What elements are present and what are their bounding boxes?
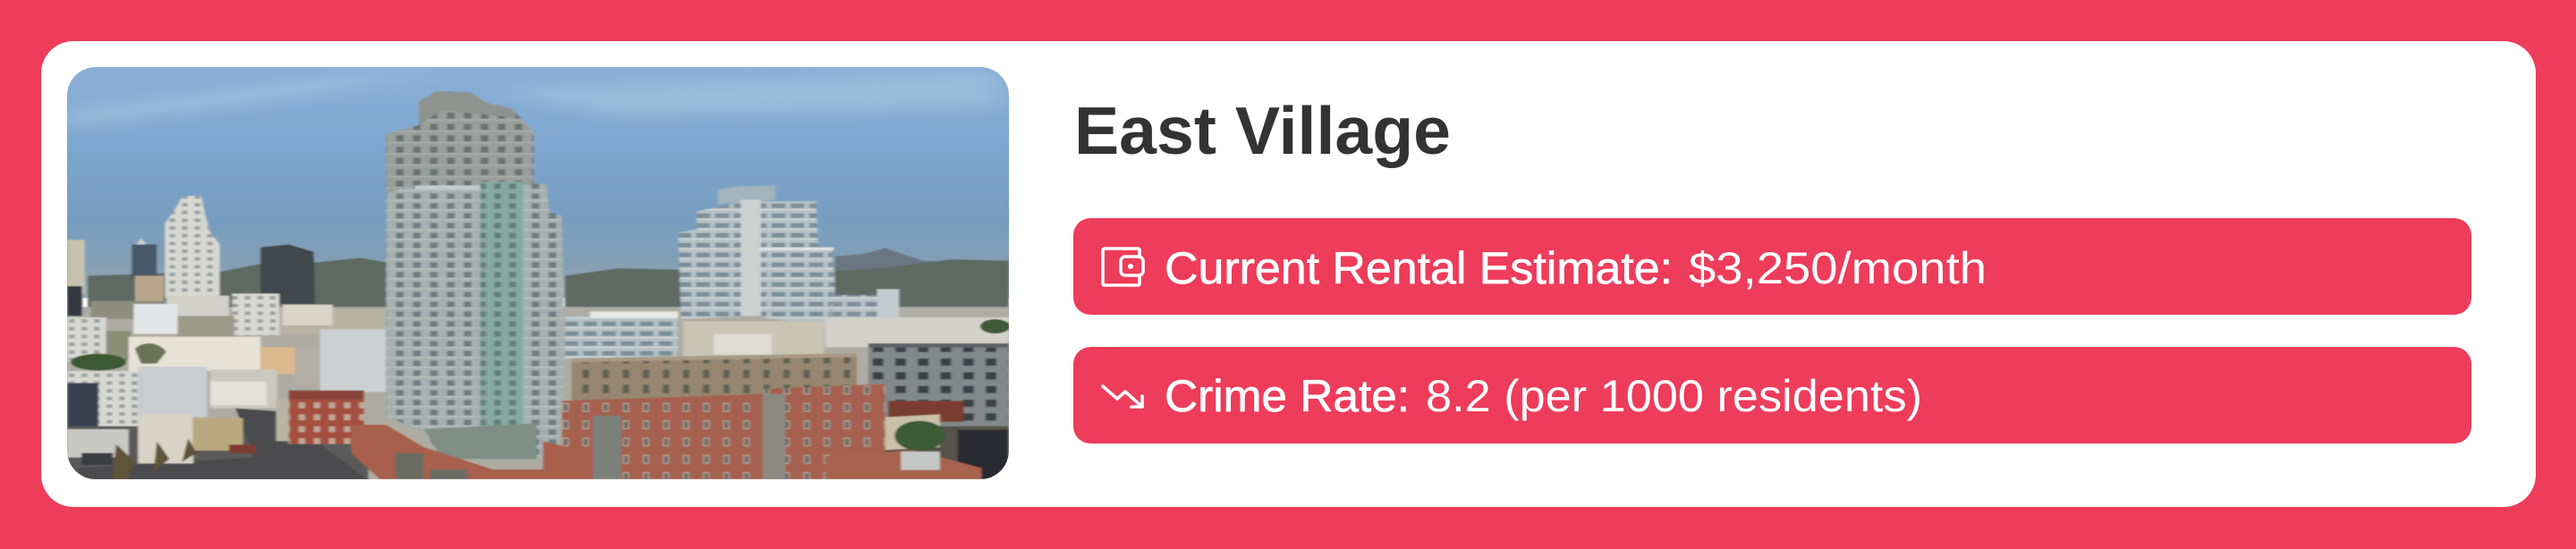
brick apartment block xyxy=(562,353,1009,479)
stat bar: crime rate xyxy=(1073,347,2471,443)
mid-ground city base xyxy=(54,307,1033,486)
text: crime rate xyxy=(1165,371,1922,421)
foreground low brick xyxy=(352,425,981,479)
right tower xyxy=(678,185,835,328)
text: rental estimate: Current Rental Estimate: xyxy=(1165,243,1673,293)
left skyline xyxy=(67,195,386,480)
icon: wallet xyxy=(1101,247,1145,287)
text: rental estimate xyxy=(1165,243,1987,293)
text: rental estimate: $3,250/month xyxy=(1689,243,1987,293)
main tower xyxy=(386,91,565,459)
text: crime rate: 8.2 (per 1000 residents) xyxy=(1426,371,1922,421)
icon: trending down arrow xyxy=(1101,384,1144,409)
mountain xyxy=(835,248,1009,292)
far trees xyxy=(88,258,1009,322)
stat bar: current rental estimate xyxy=(1073,218,2471,315)
right background buildings xyxy=(565,289,1010,429)
photo: East Village skyline xyxy=(67,67,1009,479)
sky xyxy=(54,60,1033,298)
heading: East Village: East Village xyxy=(1074,93,1451,168)
text: crime rate: Crime Rate: xyxy=(1165,371,1410,421)
clouds xyxy=(67,72,996,128)
